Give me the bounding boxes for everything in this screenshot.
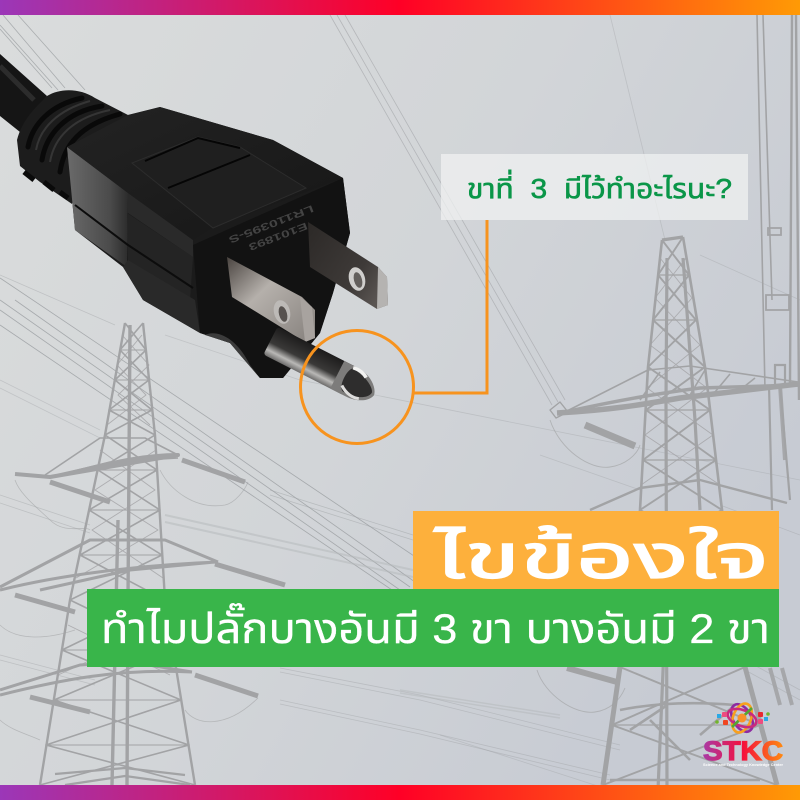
subtitle panel: green: ทำไมปลั๊กบางอันมี 3 ขา บางอันมี 2 ขา bbox=[101, 602, 770, 652]
neutral blade bbox=[308, 222, 388, 309]
callout connector: circle highlight and elbow line bbox=[300, 220, 487, 444]
callout box: question: ขาที่ 3 มีไว้ทำอะไรนะ? bbox=[467, 169, 732, 204]
subtitle panel: green bbox=[87, 589, 779, 667]
moulded markings: LR110395-S bbox=[226, 202, 315, 245]
cord bbox=[0, 54, 47, 132]
moulded markings: E101893 bbox=[246, 220, 309, 252]
plug front face bbox=[193, 178, 350, 378]
electricity pylon: left bbox=[0, 323, 285, 785]
title panel: orange: ไขข้องใจ bbox=[433, 523, 769, 592]
bottom-right logo: STKC bbox=[703, 701, 784, 767]
plug body bbox=[67, 107, 350, 378]
electricity pylon: far right bbox=[757, 15, 799, 705]
logo tagline: Science and Technology Knowledge Center bbox=[703, 763, 784, 767]
icon: atom bbox=[715, 701, 770, 735]
round earth pin bbox=[263, 327, 382, 408]
callout box: question bbox=[441, 154, 748, 220]
logotype: STKC bbox=[703, 736, 783, 766]
live blade bbox=[227, 257, 315, 342]
title panel: orange bbox=[413, 511, 779, 592]
top gradient bar bbox=[0, 0, 800, 15]
moulded markings bbox=[226, 202, 320, 258]
power plug photo bbox=[0, 54, 388, 408]
electricity pylon: centre bbox=[537, 237, 798, 790]
grip recess bbox=[132, 137, 306, 228]
strain relief bbox=[17, 90, 128, 204]
bottom gradient bar bbox=[0, 785, 800, 800]
